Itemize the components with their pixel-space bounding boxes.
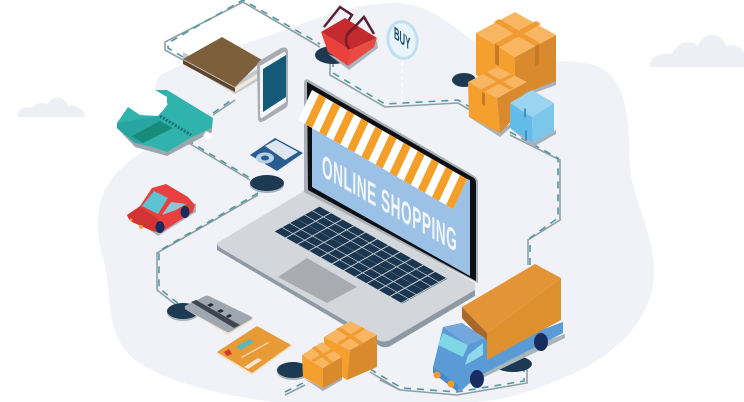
laptop screen bezel: [304, 79, 478, 283]
screen: [312, 122, 470, 276]
icon: smartphone: [257, 48, 288, 122]
cloud left: [18, 98, 85, 117]
icon: t-shirt: [117, 90, 213, 156]
small boxes: [302, 321, 377, 391]
front bumper: [433, 367, 458, 392]
icon: BUY badge: [383, 18, 422, 62]
blue box: [510, 90, 556, 147]
keyboard: [278, 208, 444, 302]
icon: book: [183, 37, 262, 94]
wheels: [470, 370, 484, 388]
laptop base: [217, 243, 475, 347]
grey credit card: [185, 296, 253, 335]
icon: music player: [250, 138, 303, 171]
cab: [433, 323, 487, 392]
cloud right: [650, 35, 744, 67]
trackpad: [278, 258, 357, 303]
laptop: [217, 79, 478, 347]
connector lines: [157, 0, 560, 395]
chassis: [465, 334, 565, 384]
large orange box: [476, 12, 556, 100]
back box: [324, 337, 350, 380]
delivery truck: [433, 264, 565, 392]
lights: [434, 372, 440, 378]
front box: [303, 376, 342, 391]
awning: [298, 90, 467, 209]
icon: red car: [127, 184, 196, 236]
medium orange box: [468, 67, 527, 137]
orange credit card: [217, 326, 291, 375]
screen text: ONLINE SHOPPING: [322, 149, 457, 260]
background blob: [98, 3, 654, 402]
node discs: [167, 46, 532, 380]
icon: BUY badge: BUY: [394, 22, 411, 54]
icon: shopping basket: [321, 7, 378, 70]
cargo box: [487, 278, 561, 360]
